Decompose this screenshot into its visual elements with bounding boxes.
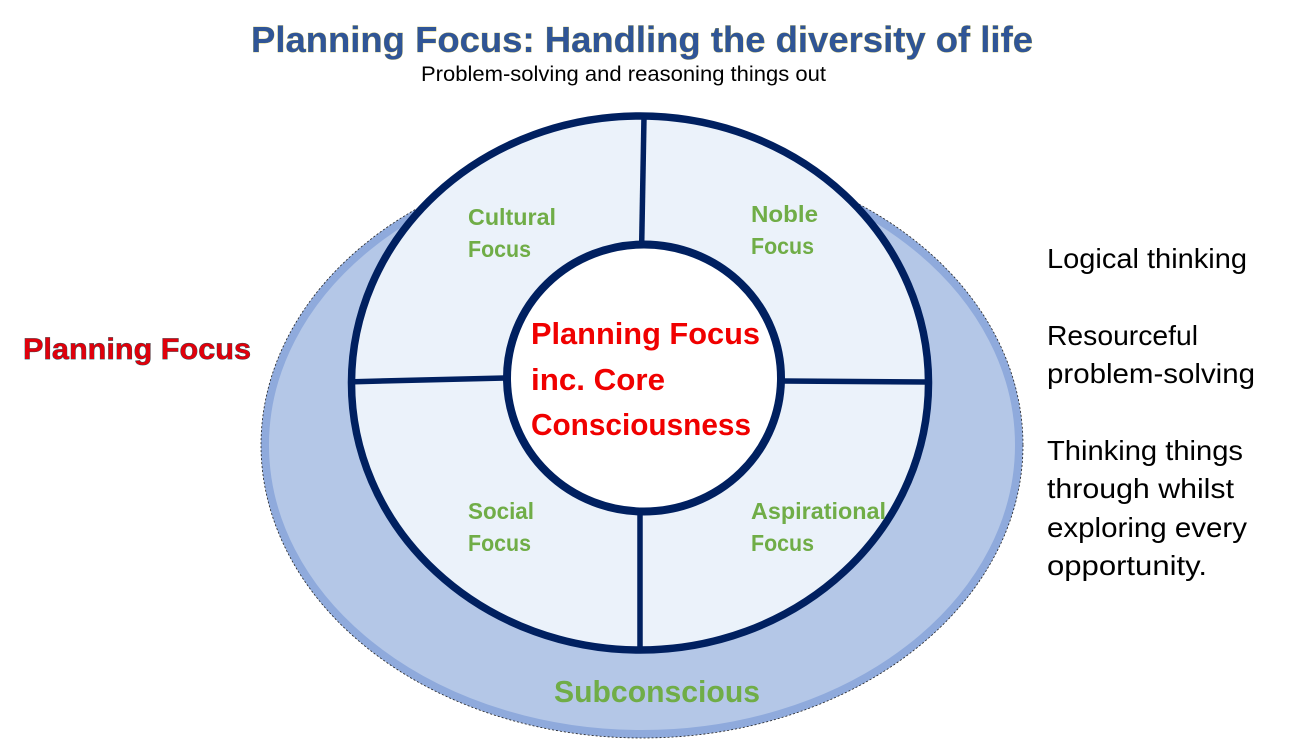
- segment: Aspirational Focus: Focus: [751, 530, 814, 556]
- segment: Social Focus: [468, 498, 534, 556]
- segment: Cultural Focus: Focus: [468, 236, 531, 262]
- divider spokes: [354, 117, 927, 649]
- right text block: Thinking things: [1047, 435, 1243, 466]
- right text block: through whilst: [1047, 473, 1234, 504]
- right text block: Logical thinking: [1047, 243, 1247, 274]
- segment: Aspirational Focus: Aspirational: [751, 498, 886, 524]
- centre circle: [507, 244, 781, 512]
- right text block: exploring every: [1047, 512, 1247, 543]
- subconscious ellipse: [261, 152, 1023, 738]
- right text block: opportunity.: [1047, 550, 1207, 581]
- centre text: [531, 316, 760, 442]
- segment: Cultural Focus: Cultural: [468, 204, 556, 230]
- centre text: inc. Core: [531, 362, 665, 397]
- right text block: problem-solving: [1047, 358, 1255, 389]
- title: Planning Focus: Handling the diversity of life: [251, 19, 1033, 60]
- centre text: Consciousness: [531, 407, 751, 442]
- right text block: [1047, 243, 1255, 581]
- segment: Aspirational Focus: [751, 498, 886, 556]
- focus wheel: [352, 116, 928, 650]
- centre text: Planning Focus: [531, 316, 760, 351]
- label: Planning Focus: Planning Focus: [23, 333, 251, 366]
- segment: Cultural Focus: [468, 204, 556, 262]
- right text block: Resourceful: [1047, 320, 1198, 351]
- segment: Noble Focus: Focus: [751, 233, 814, 259]
- segment: Noble Focus: [751, 201, 818, 259]
- subtitle: Problem-solving and reasoning things out: [421, 63, 826, 86]
- outer ring: [352, 116, 928, 650]
- segment: Social Focus: Focus: [468, 530, 531, 556]
- segment: Noble Focus: Noble: [751, 201, 818, 227]
- segment: Social Focus: Social: [468, 498, 534, 524]
- label: Subconscious: Subconscious: [554, 674, 760, 709]
